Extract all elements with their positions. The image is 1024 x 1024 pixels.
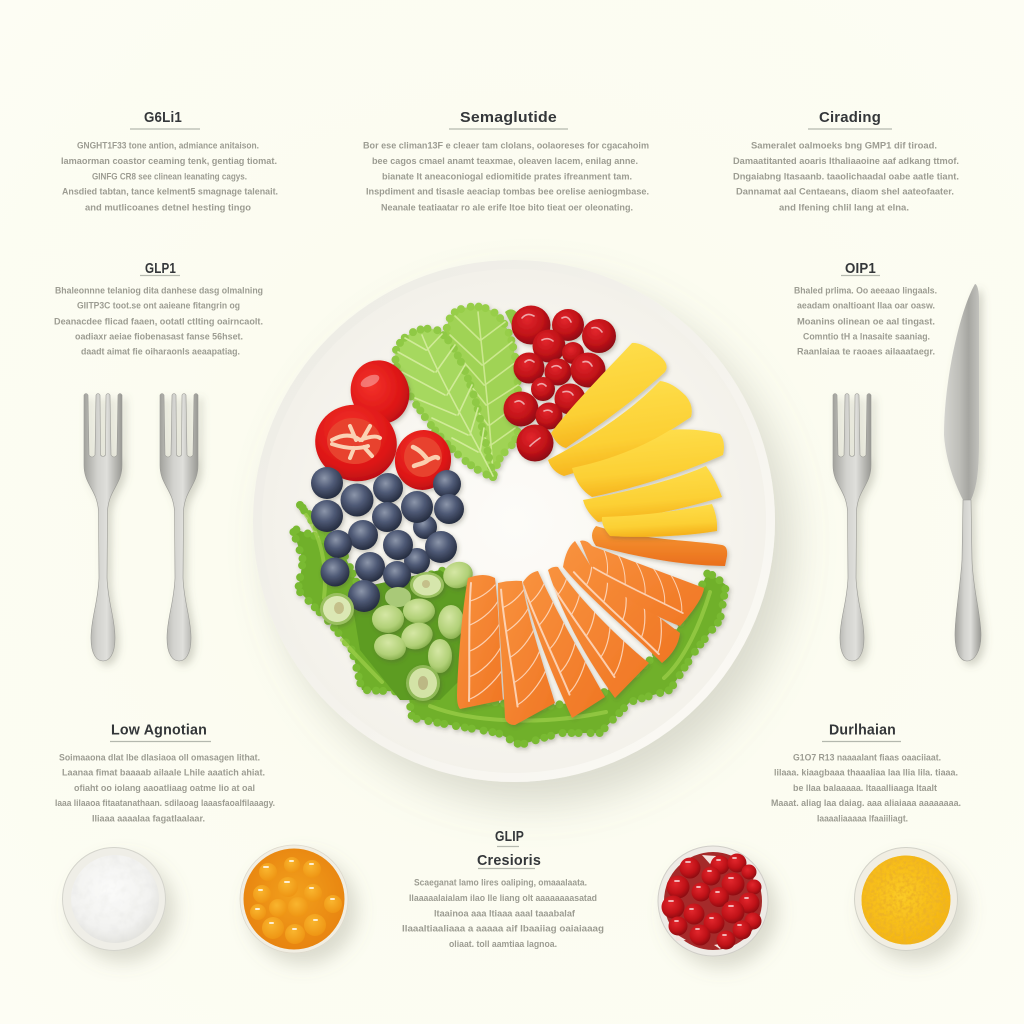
panel: Durlhaian bbox=[771, 722, 961, 824]
cut tomato left bbox=[307, 396, 405, 490]
body text: Semaglutide: bee cagos cmael anamt teaxmae, oleaven lacem, enilag anne. bbox=[372, 156, 638, 167]
heading: OIP1: OIP1 bbox=[845, 261, 876, 277]
body text: GLIP Cresioris: ltaainoa aaa ltiaaa aaal taaabalaf bbox=[434, 908, 576, 920]
panel: GLP1 bbox=[54, 261, 263, 358]
body text: OIP1: Raanlaiaa te raoaes ailaaataegr. bbox=[797, 346, 935, 358]
cherry tomatoes cluster bbox=[504, 306, 616, 462]
salmon slice 4 bbox=[547, 561, 649, 698]
body text: Durlhaian: Maaat. aliag laa daiag. aaa aliaiaaa aaaaaaaa. bbox=[771, 798, 961, 809]
carrot stick bbox=[592, 526, 727, 566]
panel: Semaglutide bbox=[363, 110, 649, 214]
panel: OIP1 bbox=[794, 261, 937, 358]
body text: Cirading bbox=[733, 140, 959, 214]
panel: G6Li1 bbox=[61, 110, 278, 214]
body text: OIP1: Moanins olinean oe aal tingast. bbox=[797, 316, 935, 328]
salmon slice 2 bbox=[498, 581, 555, 725]
body text: Semaglutide: Bor ese climan13F e cleaer tam clolans, oolaoreses for cgacahoim bbox=[363, 140, 649, 152]
body text: G6Li1: Iamaorman coastor ceaming tenk, gentiag tiomat. bbox=[61, 156, 277, 167]
infographic canvas bbox=[54, 111, 988, 974]
bowl: orange yolks bbox=[240, 845, 348, 953]
sliced cucumbers bbox=[320, 572, 444, 701]
heading: G6Li1: G6Li1 bbox=[144, 110, 182, 126]
body text: Low Agnotian bbox=[55, 752, 275, 824]
salmon slices bbox=[457, 541, 704, 725]
heading: Cresioris: Cresioris bbox=[477, 853, 541, 869]
body text: GLP1: GIITP3C toot.se ont aaieane fitangrin og bbox=[77, 300, 240, 312]
salmon slice 1 bbox=[457, 575, 503, 709]
body text: GLIP Cresioris: Ilaaaaalaialam ilao lle liang olt aaaaaaaasatad bbox=[409, 893, 597, 904]
heading: Cirading: Cirading bbox=[819, 110, 881, 126]
body text: G6Li1: GINFG CR8 see clinean leanating cagys. bbox=[92, 172, 247, 182]
body text: G6Li1: GNGHT1F33 tone antion, admiance anitaison. bbox=[77, 140, 259, 152]
heading: Low Agnotian: Low Agnotian bbox=[111, 722, 207, 738]
lettuce leaves bbox=[395, 306, 519, 477]
body text: OIP1: Bhaled prlima. Oo aeeaao lingaals. bbox=[794, 286, 937, 296]
heading: GLIP: GLIP bbox=[495, 829, 524, 845]
body text: GLIP Cresioris: Scaeganat lamo lires oaliping, omaaalaata. bbox=[414, 878, 587, 888]
panel: Low Agnotian bbox=[55, 722, 275, 824]
body text: Semaglutide: Inspdiment and tisasle aeaciap tombas bee orelise aeniogmbase. bbox=[366, 186, 649, 198]
lettuce bed under the food bbox=[292, 505, 726, 745]
tomatoes bbox=[307, 352, 456, 494]
body text: GLP1: Deanacdee flicad faaen, ootatl ctlting oairncaolt. bbox=[54, 316, 263, 328]
body text: Durlhaian: G1O7 R13 naaaalant fiaas oaaciiaat. bbox=[793, 752, 941, 764]
back lettuce leaf bbox=[446, 306, 519, 477]
left fork one bbox=[84, 394, 122, 661]
whole tomato bbox=[342, 352, 418, 432]
bowl: white powder bbox=[62, 848, 166, 950]
body text: Cirading: Damaatitanted aoaris Ithaliaaoine aaf adkang ttmof. bbox=[733, 156, 959, 167]
body text: Low Agnotian: Laanaa fimat baaaab ailaale Lhile aaatich ahiat. bbox=[62, 768, 265, 778]
body text: OIP1 bbox=[794, 286, 937, 358]
panel: Cirading bbox=[733, 110, 959, 214]
body text: GLIP Cresioris: oliaat. toll aamtiaa lagnoa. bbox=[449, 939, 557, 950]
body text: G6Li1: and mutlicoanes detnel hesting tingo bbox=[85, 202, 251, 214]
bowl: red berries bbox=[658, 846, 768, 956]
heading: Durlhaian: Durlhaian bbox=[829, 722, 896, 738]
body text: GLIP Cresioris: Ilaaaltiaaliaaa a aaaaa aif lbaaiiag oaiaiaaag bbox=[402, 924, 604, 934]
body text: Durlhaian: lilaaa. kiaagbaaa thaaaliaa laa llia lila. tiaaa. bbox=[774, 768, 958, 778]
bowl: yellow spice bbox=[854, 848, 958, 950]
body text: Cirading: Dannamat aal Centaeans, diaom shel aateofaater. bbox=[736, 186, 954, 198]
body text: Low Agnotian: Iaaa lilaaoa fitaatanathaan. sdilaoag laaasfaoalfilaaagy. bbox=[55, 798, 275, 809]
right fork bbox=[833, 394, 871, 661]
green beans bbox=[320, 558, 477, 701]
body text: Low Agnotian: ofiaht oo iolang aaoatliaag oatme lio at oal bbox=[74, 783, 255, 794]
body text: OIP1: Comntio tH a lnasaite saaniag. bbox=[803, 332, 930, 342]
body text: Semaglutide bbox=[363, 140, 649, 214]
body text: G6Li1 bbox=[61, 140, 278, 214]
body text: GLP1: Bhaleonnne telaniog dita danhese dasg olmalning bbox=[55, 286, 263, 296]
yellow squash slices bbox=[548, 343, 724, 537]
heading: Semaglutide: Semaglutide bbox=[460, 110, 557, 126]
body text: Cirading: Dngaiabng ltasaanb. taaolichaadal oabe aatle tiant. bbox=[733, 172, 959, 182]
plate bbox=[253, 260, 775, 782]
heading: GLP1: GLP1 bbox=[145, 261, 176, 277]
cut tomato right bbox=[390, 426, 456, 494]
salmon slice 6 bbox=[580, 541, 704, 626]
body text: OIP1: aeadam onaltioant llaa oar oasw. bbox=[797, 300, 935, 312]
body text: G6Li1: Ansdied tabtan, tance kelment5 smagnage talenait. bbox=[62, 186, 278, 198]
body text: GLP1 bbox=[54, 286, 263, 358]
left fork two bbox=[160, 394, 198, 661]
body text: Durlhaian: be llaa balaaaaa. ltaaalliaaga ltaalt bbox=[793, 783, 938, 794]
body text: GLP1: oadiaxr aeiae fiobenasast fanse 56hset. bbox=[75, 332, 243, 342]
body text: Semaglutide: bianate It aneaconiogal ediomitide prates ifreanment tam. bbox=[382, 172, 632, 182]
front lettuce leaf bbox=[395, 329, 493, 477]
knife bbox=[944, 284, 981, 661]
body text: Semaglutide: Neanale teatiaatar ro ale erife ltoe bito tieat oer oleonating. bbox=[381, 202, 633, 214]
salmon slice 5 bbox=[563, 541, 682, 663]
salmon slice 3 bbox=[522, 571, 605, 718]
body text: GLIP Cresioris bbox=[402, 878, 604, 950]
body text: Low Agnotian: Soimaaona dlat lbe dlasiaoa oll omasagen lithat. bbox=[59, 752, 260, 764]
panel: GLIP Cresioris bbox=[402, 829, 604, 950]
body text: Cirading: and Ifening chlil lang at elna. bbox=[779, 202, 909, 214]
body text: Durlhaian bbox=[771, 752, 961, 824]
body text: GLP1: daadt aimat fie oiharaonls aeaapatiag. bbox=[81, 346, 240, 358]
blueberries bbox=[311, 467, 464, 612]
body text: Cirading: Sameralet oalmoeks bng GMP1 dif tiroad. bbox=[751, 140, 937, 152]
body text: Durlhaian: Iaaaaliaaaaa lfaaiiliagt. bbox=[817, 814, 908, 824]
body text: Low Agnotian: Iliaaa aaaalaa fagatlaalaar. bbox=[92, 814, 205, 824]
